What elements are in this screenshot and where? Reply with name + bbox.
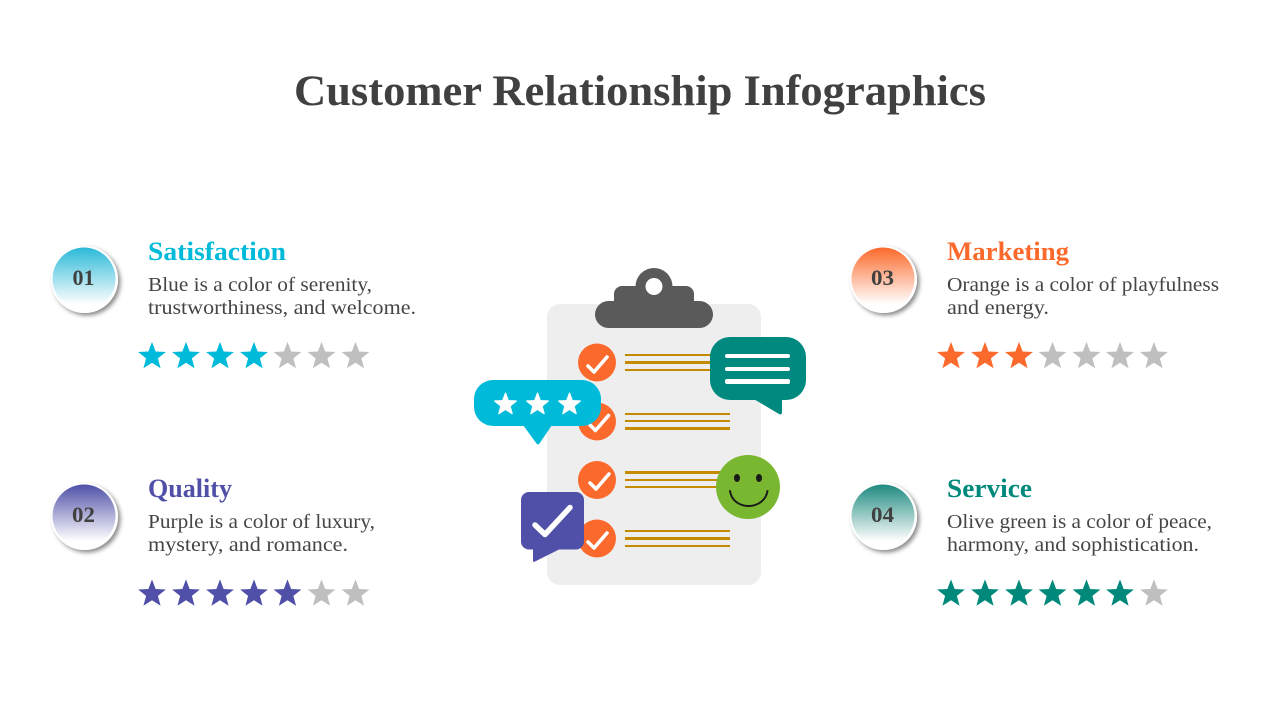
description: marketing: Orange is a color of playfulness <box>947 274 1219 296</box>
purple check bubble <box>521 492 584 562</box>
clipboard board <box>547 304 761 585</box>
description: satisfaction: Blue is a color of serenity, <box>148 274 372 296</box>
badge 02 <box>51 483 118 550</box>
central clipboard illustration <box>474 268 806 585</box>
panel: service <box>850 474 1212 606</box>
title: Customer Relationship Infographics <box>294 68 986 115</box>
checklist row 1 <box>578 344 730 382</box>
description: marketing: and energy. <box>947 297 1049 319</box>
checklist row 3 <box>578 461 730 499</box>
description: quality: mystery, and romance. <box>148 534 348 556</box>
blue rating bubble <box>474 380 601 444</box>
teal message bubble <box>710 337 806 414</box>
star rating: 4 of 7 <box>138 342 369 368</box>
description: quality: Purple is a color of luxury, <box>148 511 375 533</box>
badge 03: 03 <box>871 265 894 290</box>
clipboard clip <box>595 268 713 328</box>
checklist row 2 <box>578 402 730 440</box>
panel: satisfaction <box>51 237 416 368</box>
badge 03 <box>850 246 917 313</box>
panel: marketing <box>850 237 1219 368</box>
badge 01: 01 <box>72 265 94 290</box>
description: service: Olive green is a color of peace, <box>947 511 1212 533</box>
green smiley <box>716 455 780 519</box>
heading: Marketing: Marketing <box>947 237 1069 266</box>
star rating: 3 of 7 <box>937 342 1168 368</box>
panel: quality <box>51 474 375 606</box>
description: service: harmony, and sophistication. <box>947 534 1199 556</box>
star rating: 5 of 7 <box>138 579 369 606</box>
badge 02: 02 <box>72 502 95 527</box>
badge 01 <box>51 246 118 313</box>
heading: Service: Service <box>947 474 1032 503</box>
heading: Satisfaction: Satisfaction <box>148 237 287 266</box>
badge 04 <box>850 483 917 550</box>
heading: Quality: Quality <box>148 474 232 503</box>
description: satisfaction: trustworthiness, and welcome. <box>148 297 416 319</box>
checklist row 4 <box>578 520 730 558</box>
star rating: 6 of 7 <box>937 579 1168 606</box>
badge 04: 04 <box>871 502 894 527</box>
